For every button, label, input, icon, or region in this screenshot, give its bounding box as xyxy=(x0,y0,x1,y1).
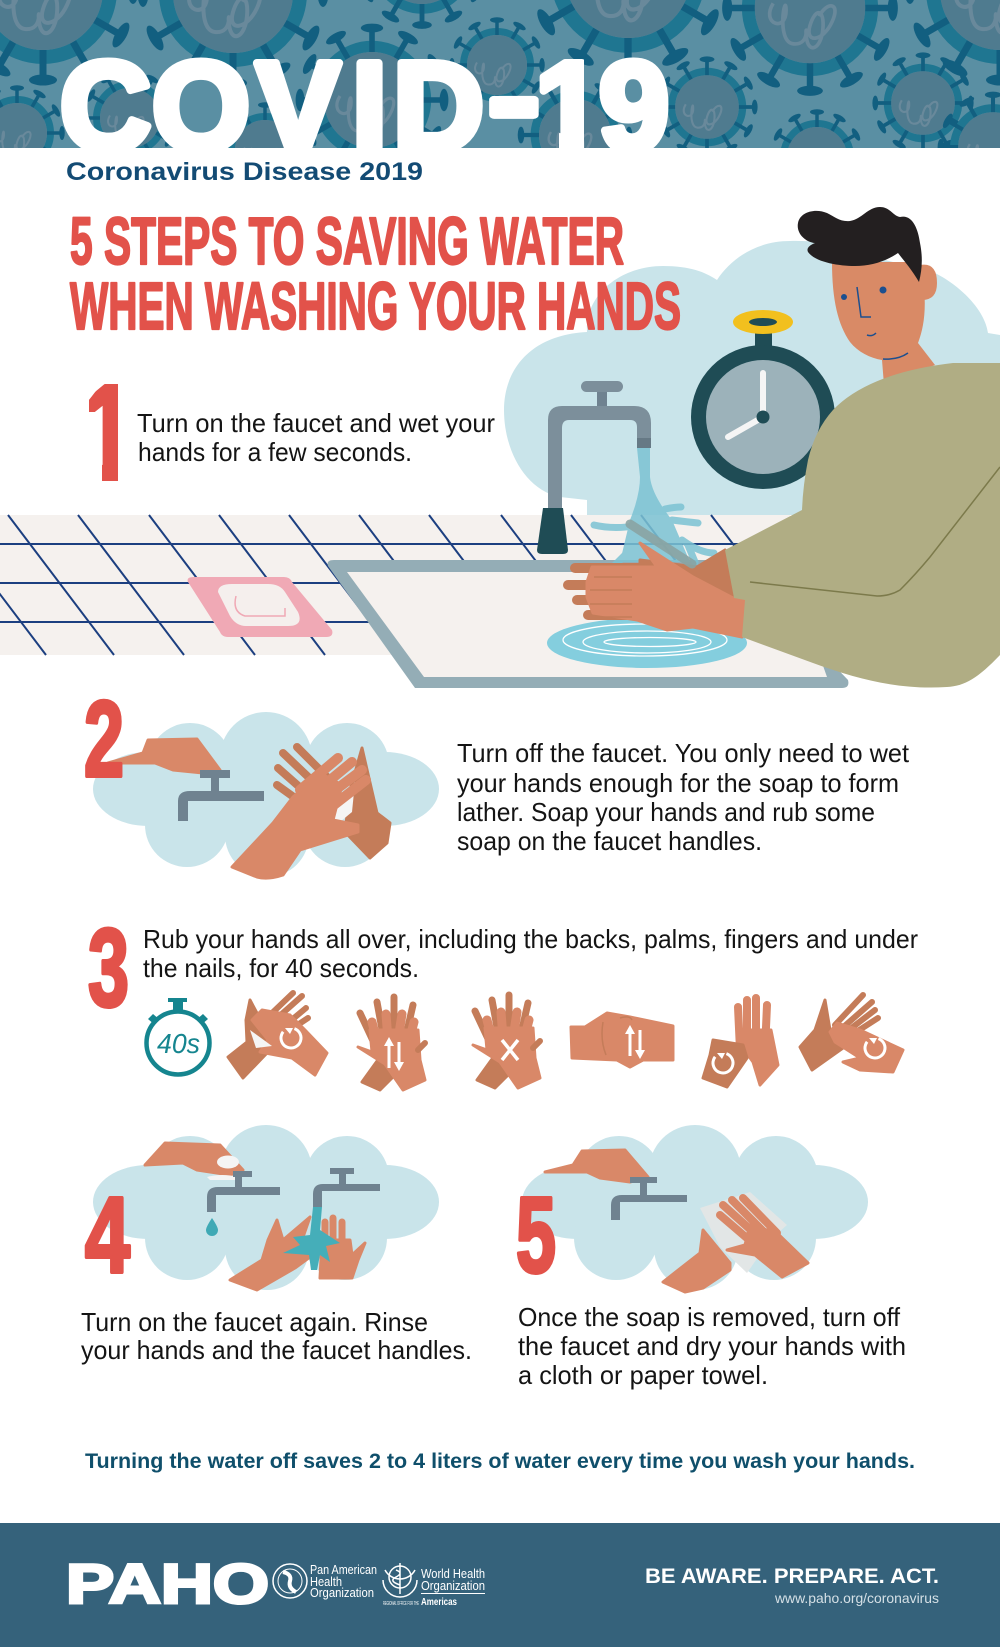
big cloud xyxy=(504,241,1000,515)
step 1 text xyxy=(137,408,495,467)
tiled counter xyxy=(0,515,817,655)
step 4 text xyxy=(81,1307,472,1365)
step 1 number: 1 xyxy=(79,357,139,511)
faucet xyxy=(178,770,264,821)
step 4 text: Turn on the faucet again. Rinse xyxy=(81,1307,428,1337)
soap dish xyxy=(188,577,332,637)
WHO name: World Health xyxy=(421,1567,485,1581)
WHO emblem xyxy=(383,1563,417,1597)
hand icon: thumbs xyxy=(703,998,778,1087)
faucet open xyxy=(313,1168,380,1207)
footer xyxy=(0,1523,1000,1647)
heading: 5 STEPS TO SAVING WATER xyxy=(70,204,624,279)
step 2 text: Turn off the faucet. You only need to wet xyxy=(457,738,910,768)
step 5 text: the faucet and dry your hands with xyxy=(518,1331,906,1361)
rubbing hands xyxy=(232,747,390,878)
person head xyxy=(798,207,937,385)
faucet xyxy=(611,1177,687,1220)
step 1 text: hands for a few seconds. xyxy=(138,437,412,467)
water splash xyxy=(594,448,714,565)
step 5 illustration xyxy=(522,1125,868,1292)
PAHO emblem xyxy=(273,1564,307,1598)
PAHO name: Organization xyxy=(310,1586,374,1600)
step 2 text xyxy=(457,738,910,856)
illustration: sink scene xyxy=(0,207,1000,688)
step 1 text: Turn on the faucet and wet your xyxy=(137,408,495,438)
step 2 text: lather. Soap your hands and rub some xyxy=(457,797,875,827)
step 5 text: a cloth or paper towel. xyxy=(518,1360,768,1390)
sink xyxy=(328,560,848,688)
title: 1 xyxy=(535,36,605,177)
cloud xyxy=(522,1125,868,1290)
hand icon: palm to palm xyxy=(228,993,327,1078)
WHO name xyxy=(383,1567,485,1608)
callout: Turning the water off saves 2 to 4 liters of water every time you wash your hands. xyxy=(85,1449,915,1473)
drop xyxy=(206,1218,218,1236)
hand icon: interlocked fists xyxy=(571,1013,673,1067)
stopwatch 40s xyxy=(146,998,210,1074)
towel xyxy=(700,1192,787,1273)
hand icon: fingertips xyxy=(800,995,903,1072)
faucet xyxy=(537,381,651,554)
water pool xyxy=(547,618,747,668)
title: 9 xyxy=(599,36,669,177)
WHO name: REGIONAL OFFICE FOR THE xyxy=(383,1601,419,1607)
step 4 illustration xyxy=(93,1125,439,1290)
step 2 number: 2 xyxy=(84,678,124,799)
step 3 text xyxy=(143,924,918,983)
title xyxy=(61,58,668,148)
title: COVID xyxy=(60,36,484,177)
step 3 number: 3 xyxy=(88,907,129,1030)
subtitle: Coronavirus Disease 2019 xyxy=(66,158,423,186)
slogan: BE AWARE. PREPARE. ACT. xyxy=(645,1565,939,1588)
rinsing hands xyxy=(230,1207,365,1290)
step 2 text: your hands enough for the soap to form xyxy=(457,768,899,798)
drying hands xyxy=(663,1198,808,1292)
hand icon: interlaced fingers xyxy=(473,995,540,1088)
title: - xyxy=(488,26,540,167)
PAHO name: Pan American xyxy=(310,1563,377,1577)
cloud xyxy=(93,712,439,877)
faucet closed xyxy=(207,1171,280,1212)
WHO name: Organization xyxy=(421,1579,485,1593)
step 4 number: 4 xyxy=(85,1174,130,1295)
virus pattern xyxy=(0,0,1000,148)
cloud xyxy=(93,1125,439,1290)
step 5 number: 5 xyxy=(516,1174,556,1295)
WHO name: Americas xyxy=(421,1597,457,1608)
pointing hand xyxy=(545,1150,648,1182)
website: www.paho.org/coronavirus xyxy=(774,1590,939,1606)
stopwatch 40s: 40s xyxy=(157,1028,200,1059)
heading xyxy=(70,204,681,344)
step 2 text: soap on the faucet handles. xyxy=(457,826,762,856)
step 3 text: the nails, for 40 seconds. xyxy=(143,953,419,983)
PAHO wordmark: PAHO xyxy=(66,1552,269,1615)
step 5 text: Once the soap is removed, turn off xyxy=(518,1302,901,1332)
PAHO name: Health xyxy=(310,1575,342,1589)
step 2 illustration xyxy=(93,712,439,878)
hand with soap xyxy=(145,1143,243,1175)
shirt xyxy=(725,363,1000,688)
clock xyxy=(691,310,835,489)
PAHO name xyxy=(310,1563,377,1600)
step 4 text: your hands and the faucet handles. xyxy=(81,1335,472,1365)
step 5 text xyxy=(518,1302,906,1390)
pointing hand xyxy=(108,739,220,773)
hands xyxy=(568,524,745,637)
step 3 text: Rub your hands all over, including the backs, palms, fingers and under xyxy=(143,924,918,954)
banner xyxy=(0,0,1000,148)
hand icon: back of hands xyxy=(358,997,425,1090)
